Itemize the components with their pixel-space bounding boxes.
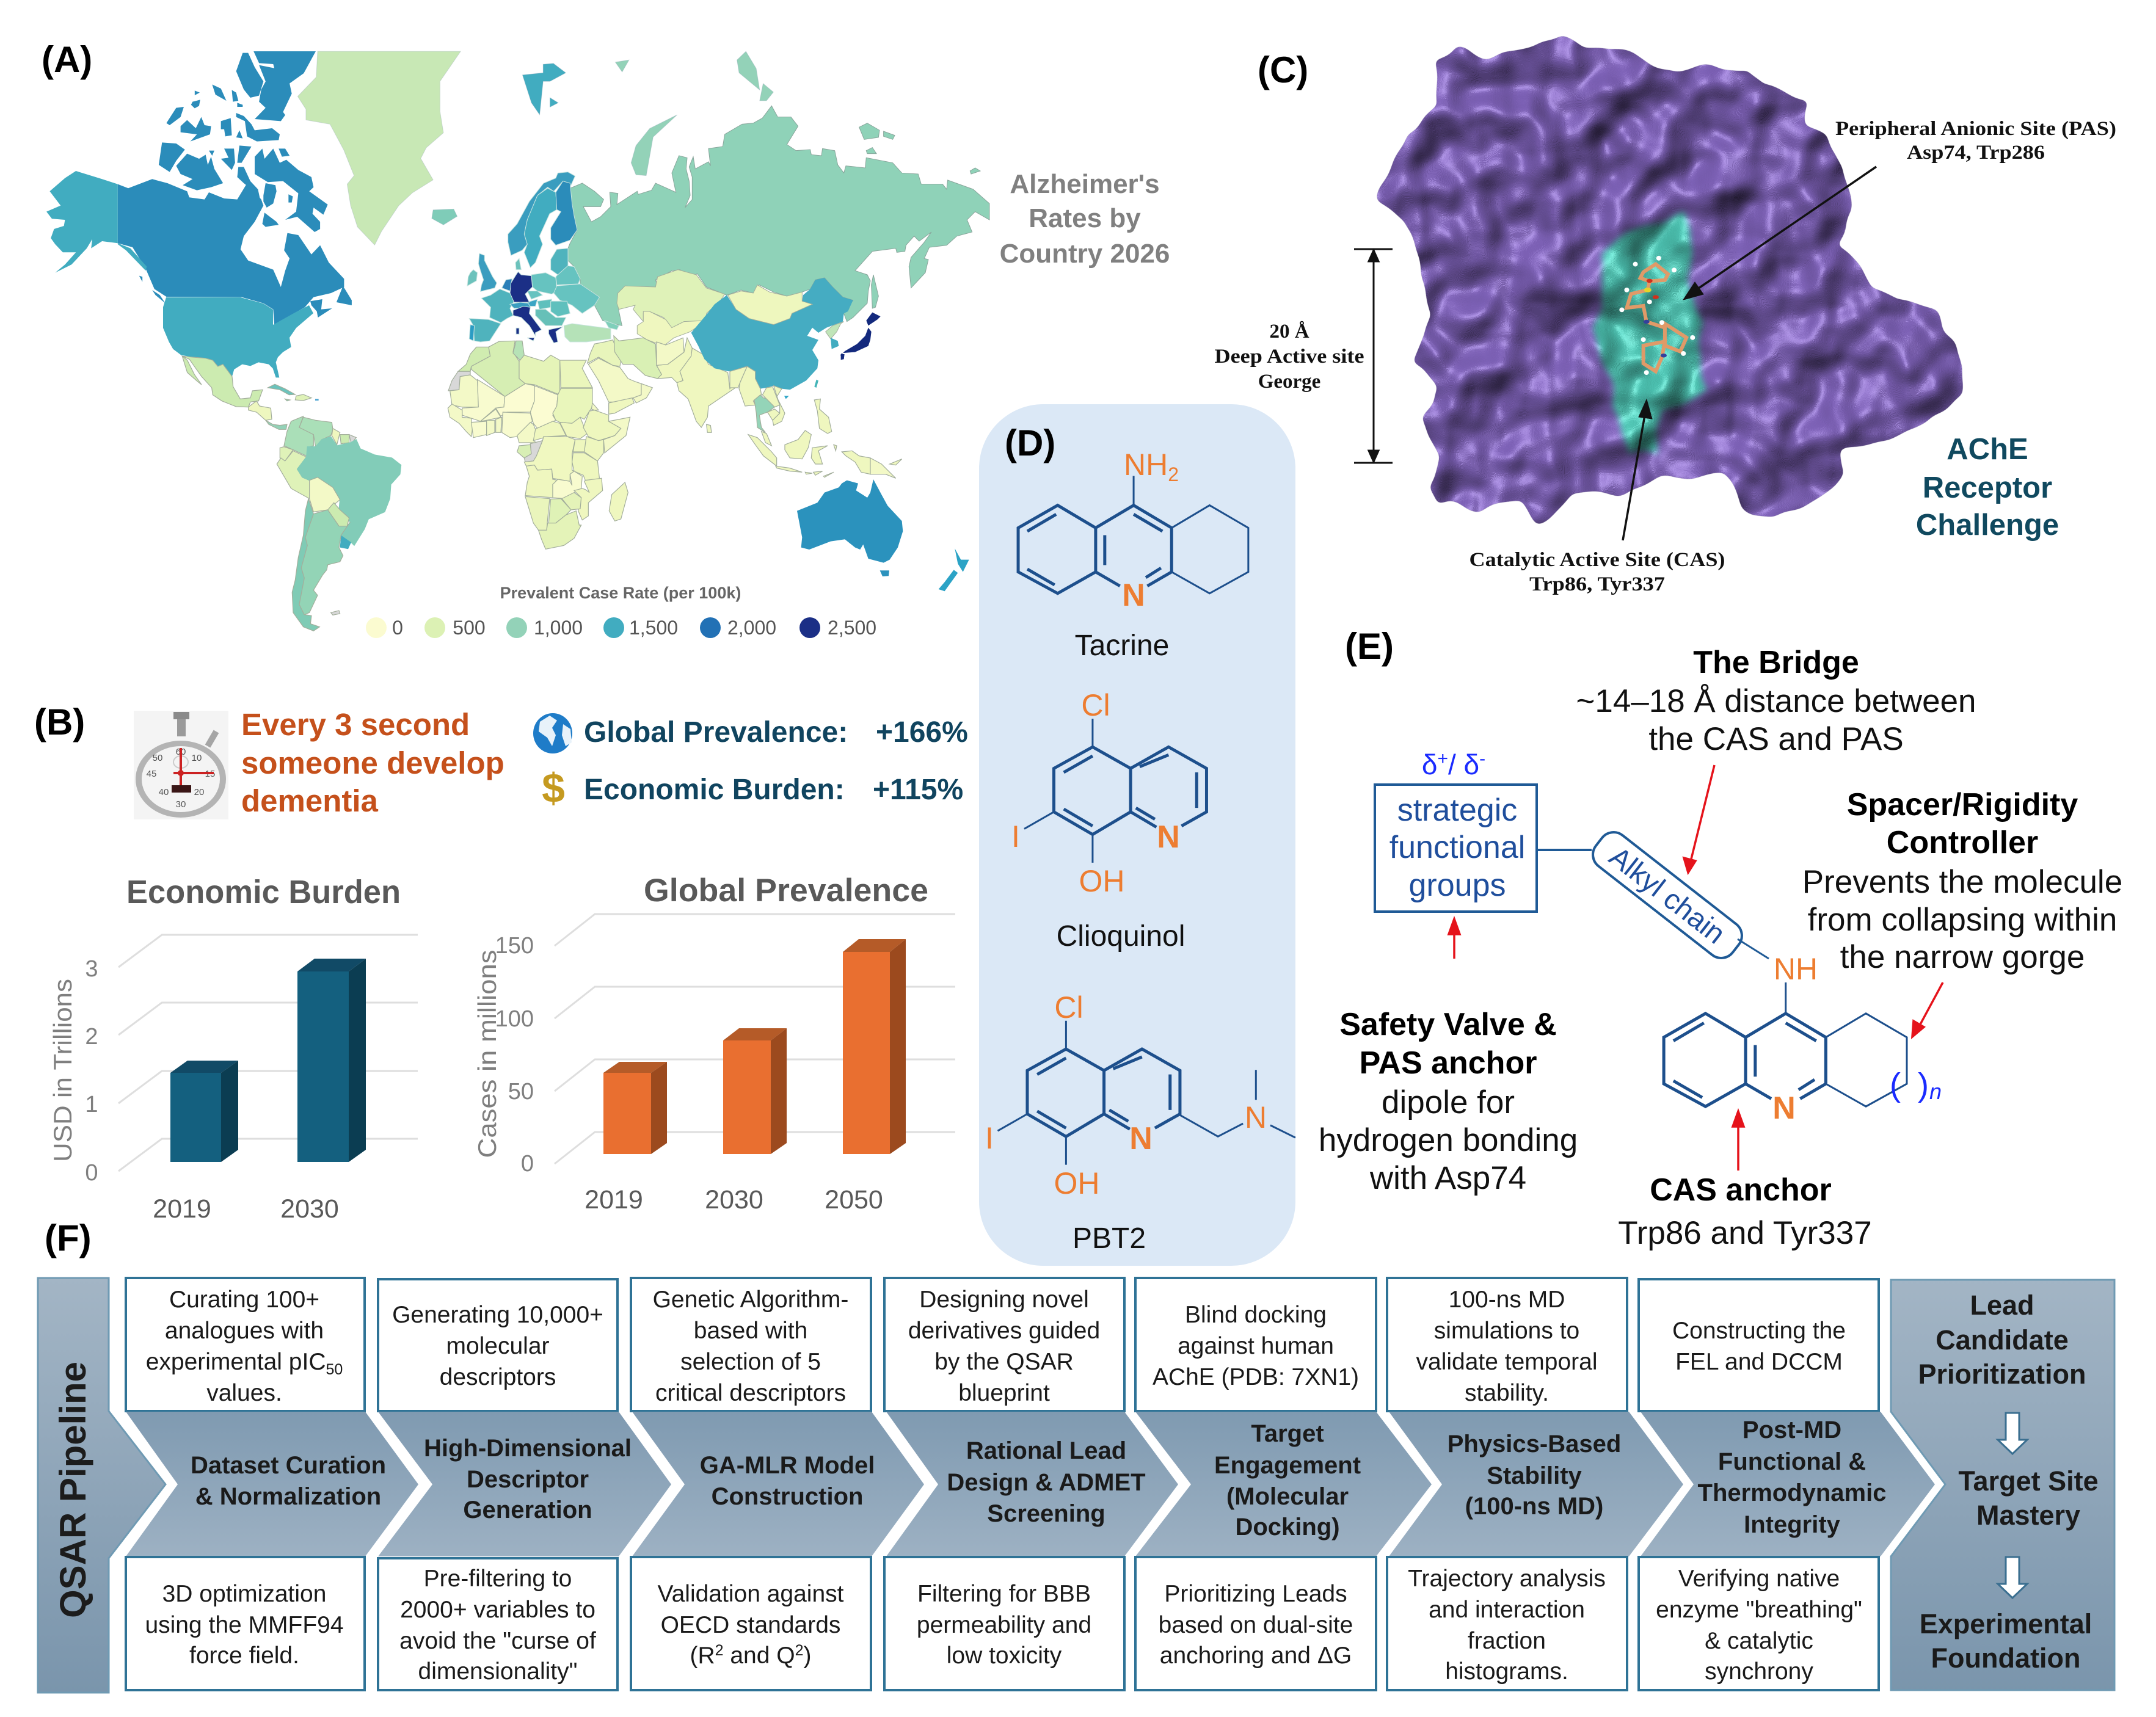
step 2: High-Dimensional [424,1435,632,1462]
partial charge label: δ [1422,749,1437,780]
bar chart: economic burden [48,874,418,1224]
step 1 [126,1278,418,1690]
map: China, Mongolia, Korea, Japan [691,278,881,390]
outcome panel: Experimental [1920,1608,2092,1639]
annotation: spacer: Controller [1887,825,2038,860]
step 1: 50 [326,1361,343,1378]
annotation: safety valve: with Asp74 [1369,1160,1526,1196]
map: Russia [568,106,989,325]
step 2: Generating 10,000+ [392,1302,603,1328]
stats: prevalence and burden: +115% [873,774,963,806]
panel background [979,404,1295,1266]
step 7: synchrony [1705,1658,1813,1685]
annotation: CAS anchor: CAS anchor [1650,1172,1832,1208]
molecule: clioquinol: N [1157,819,1180,855]
molecule: tacrine: Tacrine [1075,630,1169,662]
red arrows [1449,765,1943,1171]
step 3: critical descriptors [655,1380,846,1406]
functional groups box: groups [1408,868,1506,903]
molecule: PBT2: Cl [1054,990,1083,1025]
PAS caption: Asp74, Trp286 [1907,142,2045,164]
map: Greenland and Arctic islands [297,51,773,245]
stats: prevalence and burden: Economic Burden: [584,774,845,806]
annotation: CAS anchor [1618,1172,1872,1251]
map legend: 0 [392,617,403,639]
map legend: 1,000 [534,617,583,639]
step 5: (Molecular [1226,1483,1349,1510]
outcome panel: Mastery [1976,1500,2080,1531]
functional groups box [1375,785,1537,912]
step 7: Constructing the [1672,1318,1846,1344]
step 5: based on dual-site [1159,1612,1353,1638]
label D: (D) [1005,423,1055,463]
label E: (E) [1345,626,1394,667]
arrow: down to target site [1998,1413,2027,1454]
step 1: Dataset Curation [191,1452,386,1479]
molecule: PBT2: PBT2 [1073,1222,1146,1255]
step 3: ) [804,1643,812,1669]
icon: stopwatch: 10 [192,753,202,763]
bar chart: global prevalence [473,873,955,1214]
molecule: clioquinol: OH [1079,864,1125,898]
annotation: safety valve: dipole for [1382,1084,1515,1120]
step 4: by the QSAR [934,1349,1074,1375]
stats: prevalence and burden: +166% [876,716,968,749]
label C: (C) [1258,49,1308,90]
annotation: spacer: the narrow gorge [1840,939,2085,975]
outcome panel: Foundation [1931,1643,2080,1674]
step 6: fraction [1468,1628,1546,1654]
step 5: anchoring and ΔG [1160,1643,1352,1669]
step 6: simulations to [1434,1318,1579,1344]
step 2: Generation [463,1497,592,1523]
step 4: Filtering for BBB [917,1581,1091,1607]
step 2 [378,1279,671,1690]
map: Europe and central Asia [467,172,725,346]
CAS caption: Trp86, Tyr337 [1529,573,1665,595]
map legend: 2,000 [727,617,776,639]
scaffold molecule: NH [1774,952,1818,986]
callout: every 3 seconds [241,707,504,818]
step 2: descriptors [440,1364,556,1390]
partial charge label: / δ [1448,749,1479,780]
bar chart: economic burden: 2030 [280,1194,339,1224]
bar chart: global prevalence: 0 [521,1151,534,1177]
map legend: 500 [453,617,486,639]
step 6: Trajectory analysis [1408,1566,1606,1592]
icon: dollar: $ [542,765,565,811]
icon: stopwatch: 40 [159,787,169,797]
step 5: Engagement [1214,1452,1361,1479]
outcome panel: Target Site [1958,1465,2099,1497]
step 4: blueprint [958,1380,1050,1406]
bar chart: global prevalence: 50 [508,1079,534,1105]
molecule: tacrine: 2 [1168,463,1179,485]
PAS caption: Peripheral Anionic Site (PAS) [1835,118,2116,140]
receptor title [1916,433,2059,542]
callout: every 3 seconds: dementia [241,783,379,818]
dimension caption: George [1258,371,1320,393]
step 3: based with [694,1318,807,1344]
step 5: Target [1251,1420,1324,1447]
step 7: enzyme "breathing" [1656,1597,1862,1623]
step 5: Prioritizing Leads [1164,1581,1347,1607]
receptor title: Receptor [1923,471,2052,504]
side banner [38,1278,166,1693]
functional groups box: functional [1389,830,1525,865]
protein surface [1378,32,1961,520]
partial charge label: + [1437,749,1448,769]
molecule: PBT2: N [1245,1100,1267,1134]
map title: Country 2026 [1000,239,1170,269]
step 2: dimensionality" [418,1658,577,1685]
molecule: tacrine [1018,448,1248,662]
panel B: statistics and charts [34,702,968,1224]
step 2: 2000+ variables to [400,1597,595,1623]
icon: stopwatch: 60 [176,747,186,757]
step 3: OECD standards [661,1612,840,1638]
step 7 [1639,1279,1935,1690]
annotation: the bridge: the CAS and PAS [1648,721,1904,757]
step 6: Physics-Based [1448,1431,1621,1457]
scaffold molecule [1664,952,1942,1126]
annotation: safety valve: PAS anchor [1360,1045,1537,1081]
icon: stopwatch: 45 [147,769,156,779]
side banner: QSAR Pipeline [53,1362,93,1618]
annotation: spacer: from collapsing within [1808,902,2117,938]
alkyl chain linker [1537,826,1769,964]
step 4: Design & ADMET [947,1469,1146,1496]
step 6: (100-ns MD) [1465,1493,1603,1520]
icon: stopwatch [134,711,228,819]
bar chart: economic burden: USD in Trillions [48,979,77,1162]
bar chart: economic burden: 3 [85,956,98,982]
step 4: derivatives guided [908,1318,1100,1344]
annotation: the bridge: The Bridge [1693,645,1859,680]
map legend: 1,500 [629,617,678,639]
step 3: Genetic Algorithm- [653,1287,848,1313]
step 6: 100-ns MD [1449,1287,1565,1313]
dimension caption: Deep Active site [1214,346,1364,368]
scaffold molecule: N [1772,1091,1796,1126]
callout: every 3 seconds: Every 3 second [241,707,470,742]
CAS caption [1470,549,1725,595]
step 7: FEL and DCCM [1675,1349,1843,1375]
step 5 [1135,1278,1432,1690]
map title: Alzheimer's [1010,169,1160,199]
outcome panel: Candidate [1936,1324,2069,1356]
CAS arrow [1623,399,1652,540]
bar chart: economic burden: 2 [85,1024,98,1050]
scaffold molecule: n [1929,1079,1942,1104]
step 3: 2 [715,1642,724,1659]
step 1: & Normalization [195,1483,381,1510]
bar chart: global prevalence: Global Prevalence [644,873,928,909]
bar chart: economic burden: 0 [85,1160,98,1186]
step 5: Docking) [1235,1514,1340,1541]
molecule: PBT2: N [1129,1121,1153,1156]
step 6: histograms. [1445,1658,1568,1685]
step 4 [884,1278,1178,1690]
step 4: Designing novel [919,1287,1089,1313]
scaffold molecule: ( [1890,1067,1901,1103]
step 3: Construction [712,1483,863,1510]
step 1: using the MMFF94 [145,1612,344,1638]
step 1: 3D optimization [162,1581,326,1607]
annotation: CAS anchor: Trp86 and Tyr337 [1618,1215,1872,1251]
map: Africa and Middle East [448,336,738,549]
step 2: avoid the "curse of [399,1628,596,1654]
annotation: spacer: Spacer/Rigidity [1847,787,2078,822]
stats: prevalence and burden [584,716,968,806]
step 4: low toxicity [947,1643,1062,1669]
icon: stopwatch: 50 [153,753,162,763]
molecule: PBT2: I [985,1121,994,1155]
step 1: experimental pIC [146,1349,326,1375]
bar chart: global prevalence: 100 [495,1006,534,1032]
step 3: and Q [724,1643,795,1669]
callout: every 3 seconds: someone develop [241,746,504,780]
step 3: Validation against [657,1581,844,1607]
step 6: validate temporal [1416,1349,1598,1375]
step 2: molecular [446,1333,550,1359]
step 6: Stability [1487,1462,1582,1489]
annotation: spacer [1802,787,2122,975]
ligand in the gorge [1619,256,1695,375]
map title [1000,169,1170,269]
molecule: PBT2 [985,990,1295,1255]
map: Southeast Asia and Oceania [730,366,969,591]
step 6: and interaction [1429,1597,1585,1623]
step 4: permeability and [917,1612,1091,1638]
map legend [366,584,876,639]
dimension caption [1214,321,1364,393]
bar chart: economic burden: Economic Burden [126,874,401,910]
stats: prevalence and burden: Global Prevalence: [584,716,848,749]
annotation: safety valve [1319,1007,1578,1196]
map legend: Prevalent Case Rate (per 100k) [500,584,741,602]
annotation: the bridge [1576,645,1976,757]
step 3: (R [690,1643,715,1669]
dimension caption: 20 Å [1269,321,1309,343]
PAS arrow [1683,167,1876,300]
step 3: 2 [795,1642,804,1659]
step 7: Verifying native [1678,1566,1840,1592]
icon: stopwatch: 15 [205,769,215,779]
scaffold molecule: ) [1918,1067,1929,1103]
molecule: tacrine: N [1122,578,1145,613]
step 1: force field. [189,1643,299,1669]
label A: (A) [42,39,92,80]
molecule: clioquinol [1011,688,1206,953]
outcome panel [1891,1280,2114,1690]
icon: globe [533,713,572,753]
step 4: Screening [987,1500,1105,1527]
bar chart: global prevalence: 150 [495,933,534,959]
PAS caption [1835,118,2116,164]
arrow: down to foundation [1998,1557,2027,1598]
step 7: Thermodynamic [1698,1479,1886,1506]
map: Latin America and United States [163,297,401,631]
icon: stopwatch: 20 [194,787,204,797]
step 5: AChE (PDB: 7XN1) [1153,1364,1359,1390]
molecule: PBT2: OH [1054,1166,1099,1200]
annotation: spacer: Prevents the molecule [1802,864,2122,900]
panel A: world map [42,39,1170,639]
label B: (B) [34,702,85,742]
icon: stopwatch: 30 [176,799,186,810]
step 7: Functional & [1718,1448,1866,1475]
molecule: tacrine: NH [1124,448,1168,482]
molecule: clioquinol: Clioquinol [1057,920,1185,953]
bar chart: global prevalence: 2019 [585,1185,643,1214]
step 6: stability. [1465,1380,1549,1406]
partial charge label: - [1479,749,1485,769]
receptor title: AChE [1947,433,2028,466]
outcome panel: Lead [1970,1290,2034,1321]
panel D: known inhibitors [979,404,1295,1266]
step 3 [631,1278,924,1690]
bar chart: global prevalence: 2030 [705,1185,763,1214]
map: Canada and Alaska [46,51,352,325]
bar chart: economic burden: 2019 [153,1194,211,1224]
step 1: analogues with [165,1318,324,1344]
step 1: Curating 100+ [169,1287,319,1313]
panel F: QSAR pipeline [38,1218,2114,1693]
outcome panel: Prioritization [1918,1359,2086,1390]
step 6 [1387,1278,1683,1690]
step 1: values. [206,1380,282,1406]
bar chart: global prevalence: 2050 [825,1185,883,1214]
annotation: safety valve: Safety Valve & [1339,1007,1557,1042]
step 5: Blind docking [1185,1302,1327,1328]
dimension marker [1354,249,1393,463]
receptor title: Challenge [1916,509,2059,542]
map title: Rates by [1029,203,1141,233]
label F: (F) [45,1218,92,1258]
map legend: 2,500 [828,617,876,639]
panel C: AChE receptor [1214,32,2116,595]
annotation: safety valve: hydrogen bonding [1319,1122,1578,1158]
step 5: against human [1178,1333,1334,1359]
step 7: & catalytic [1705,1628,1813,1654]
annotation: the bridge: ~14–18 Å distance between [1576,683,1976,719]
step 2: Descriptor [467,1466,589,1493]
step 7: Integrity [1744,1511,1841,1538]
molecule: clioquinol: Cl [1081,688,1110,722]
functional groups box: strategic [1397,793,1517,828]
step 3: GA-MLR Model [700,1452,875,1479]
bar chart: economic burden: 1 [85,1092,98,1117]
panel E: design rationale [1319,626,2122,1251]
step 2: Pre-filtering to [424,1566,572,1592]
step 4: Rational Lead [966,1437,1126,1464]
molecule: clioquinol: I [1011,819,1020,854]
bar chart: global prevalence: Cases in millions [473,950,501,1158]
step 7: Post-MD [1743,1417,1841,1443]
step 3: selection of 5 [680,1349,821,1375]
alkyl chain linker: Alkyl chain [1603,840,1732,950]
CAS caption: Catalytic Active Site (CAS) [1470,549,1725,571]
